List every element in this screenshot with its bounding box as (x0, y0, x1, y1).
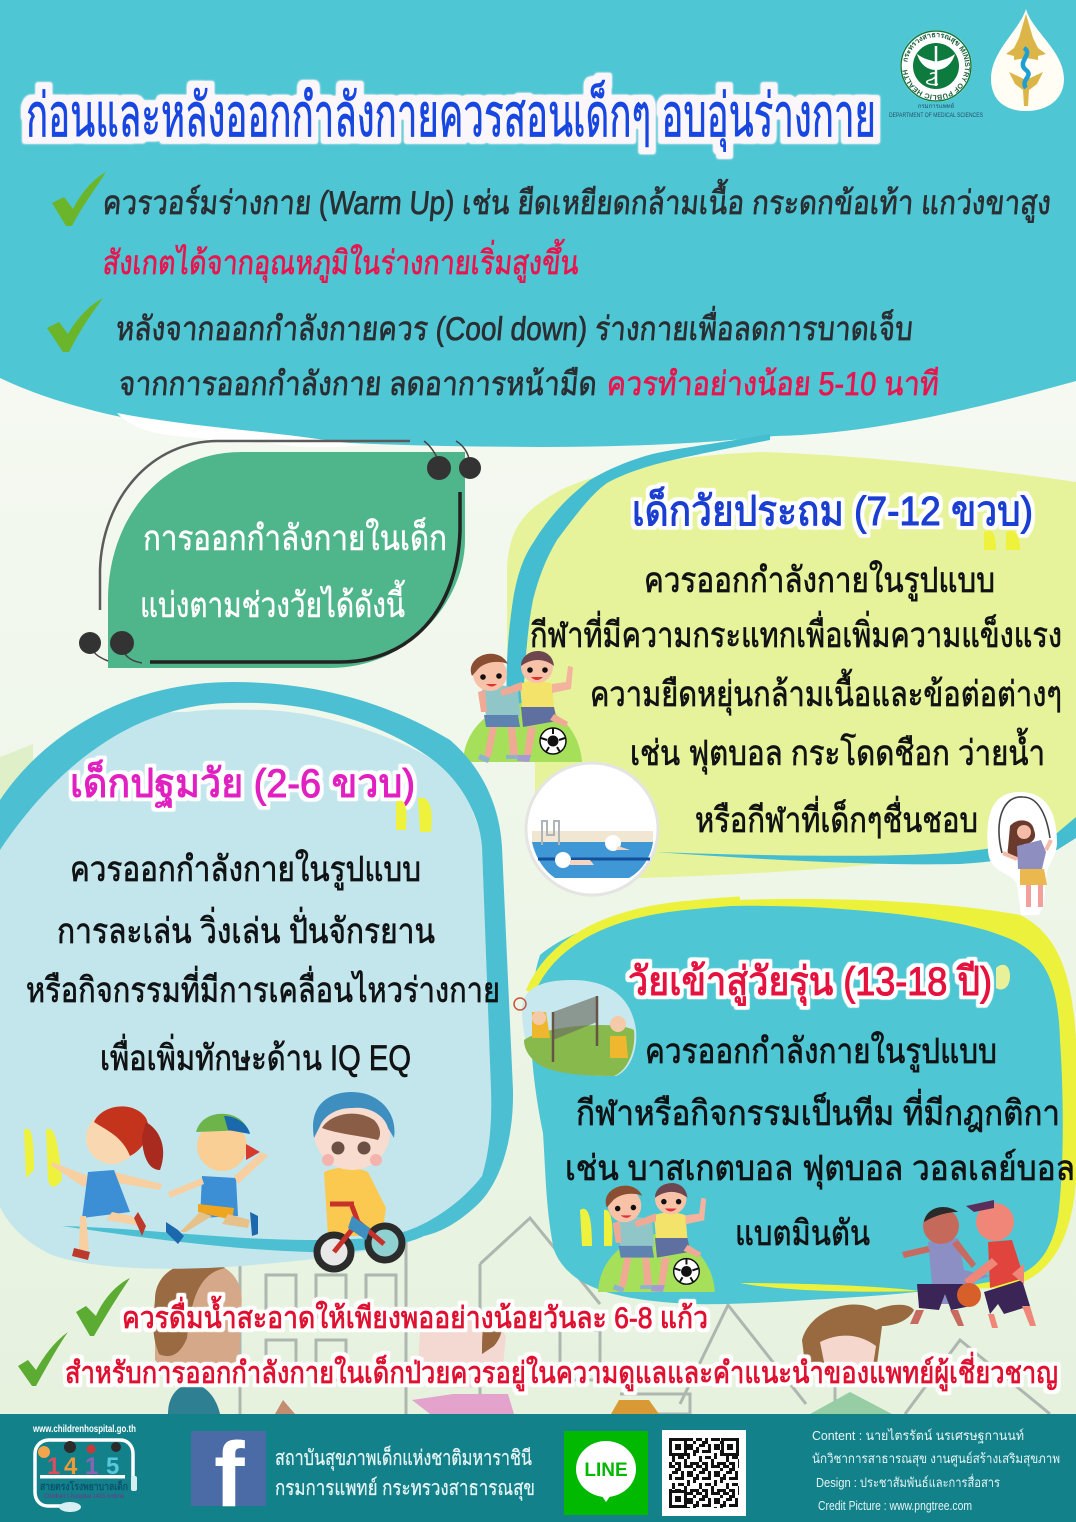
logo: Ministry of Public Health: DEPARTMENT OF MEDICAL SCIENCES (889, 113, 983, 119)
footer credits (812, 1428, 1060, 1513)
logo: line (564, 1431, 648, 1515)
bottom check 1 (76, 1278, 130, 1336)
age heading: เด็กวัยประถม (7-12 ขวบ) (632, 487, 1033, 534)
description: แบตมินตัน (735, 1214, 870, 1253)
icon: girl jumping rope (987, 792, 1057, 915)
age heading: เด็กปฐมวัย (2-6 ขวบ) (70, 759, 415, 808)
logo: hotline 1415: www.childrenhospital.go.th (32, 1424, 136, 1435)
bottom advice: ควรดื่มน้ำสะอาดให้เพียงพออย่างน้อยวันละ 6-8 แก้ว (122, 1296, 708, 1335)
panel: intro green box (79, 441, 481, 668)
bottom check 2 (18, 1332, 68, 1386)
description: เพื่อเพิ่มทักษะด้าน IQ EQ (100, 1034, 411, 1078)
icon: badminton court (514, 980, 636, 1076)
description: การละเล่น วิ่งเล่น ปั่นจักรยาน (57, 907, 435, 951)
cool down text: ควรทำอย่างน้อย 5-10 นาที (605, 366, 941, 403)
panel: top teal header (0, 0, 1076, 447)
age heading: วัยเข้าสู่วัยรุ่น (13-18 ปี) (628, 960, 992, 1006)
footer credits: Design : ประชาสัมพันธ์และการสื่อสาร (816, 1474, 1000, 1490)
panel: primary school age (507, 434, 1076, 878)
QR code (662, 1430, 746, 1516)
background scene: houses and children (0, 744, 1050, 1414)
cool down check (47, 298, 103, 352)
icon: soccer kids (463, 651, 582, 763)
white cloud shape (117, 413, 363, 447)
panel: intro green box: การออกกำลังกายในเด็ก (143, 517, 447, 558)
description: ควรออกกำลังกายในรูปแบบ (645, 1031, 997, 1072)
description: ควรออกกำลังกายในรูปแบบ (70, 849, 421, 890)
logo: hotline 1415: Children's hospital 1415 hotline (44, 1494, 125, 1500)
footer organisation text: กรมการแพทย์ กระทรวงสาธารณสุข (275, 1476, 535, 1501)
logo: facebook (191, 1424, 266, 1522)
bottom advice (65, 1296, 1058, 1391)
footer organisation text: สถาบันสุขภาพเด็กแห่งชาติมหาราชินี (275, 1444, 532, 1471)
icon: soccer kids with yellow marks (580, 1183, 715, 1293)
icon: basketball players (902, 1200, 1036, 1328)
logo: hotline 1415: 5 (106, 1453, 119, 1480)
panel: early childhood age (0, 682, 513, 1269)
description: ควรออกกำลังกายในรูปแบบ (644, 560, 995, 601)
logo: Ministry of Public Health: กระทรวงสาธารณสุข MINISTRY OF PUBLIC HEALTH (902, 32, 970, 100)
logo: medical services droplet (991, 9, 1064, 111)
illustration: children running (52, 1092, 402, 1269)
panel: intro green box: แบ่งตามช่วงวัยได้ดังนี้ (140, 579, 406, 625)
logo: Ministry of Public Health: กรมการแพทย์ (918, 102, 954, 110)
warm up text (101, 179, 1053, 283)
cool down text (114, 306, 941, 403)
panel: adolescent age (530, 899, 1076, 1304)
logo: hotline 1415: 1 (47, 1453, 60, 1480)
cool down text: หลังจากออกกำลังกายควร (Cool down) ร่างกายเพื่อลดการบาดเจ็บ (114, 306, 915, 348)
logo: hotline 1415: 4 (64, 1453, 78, 1480)
description (565, 1031, 1075, 1253)
warm up check (52, 172, 106, 226)
footer credits: Credit Picture : www.pngtree.com (818, 1498, 972, 1513)
footer bar (0, 1414, 1076, 1522)
icon: swimming pool (526, 763, 658, 895)
logo: hotline 1415: 1 (85, 1453, 98, 1480)
logo: line: LINE (584, 1460, 628, 1481)
description: หรือกิจกรรมที่มีการเคลื่อนไหวร่างกาย (26, 966, 500, 1010)
description: หรือกีฬาที่เด็กๆชื่นชอบ (695, 796, 978, 840)
footer organisation text (275, 1444, 535, 1501)
logo: Ministry of Public Health (889, 30, 983, 119)
logo: hotline 1415 (32, 1424, 137, 1512)
description (26, 849, 500, 1078)
cool down text: จากการออกกำลังกาย ลดอาการหน้ามืด (117, 366, 599, 403)
footer credits: Content : นายไตรรัตน์ นรเศรษฐกานนท์ (812, 1428, 1024, 1444)
description (530, 560, 1062, 840)
warm up text: สังเกตได้จากอุณหภูมิในร่างกายเริ่มสูงขึ้น (101, 239, 581, 283)
logo: hotline 1415: สายตรงโรงพยาบาลเด็ก (40, 1479, 128, 1493)
